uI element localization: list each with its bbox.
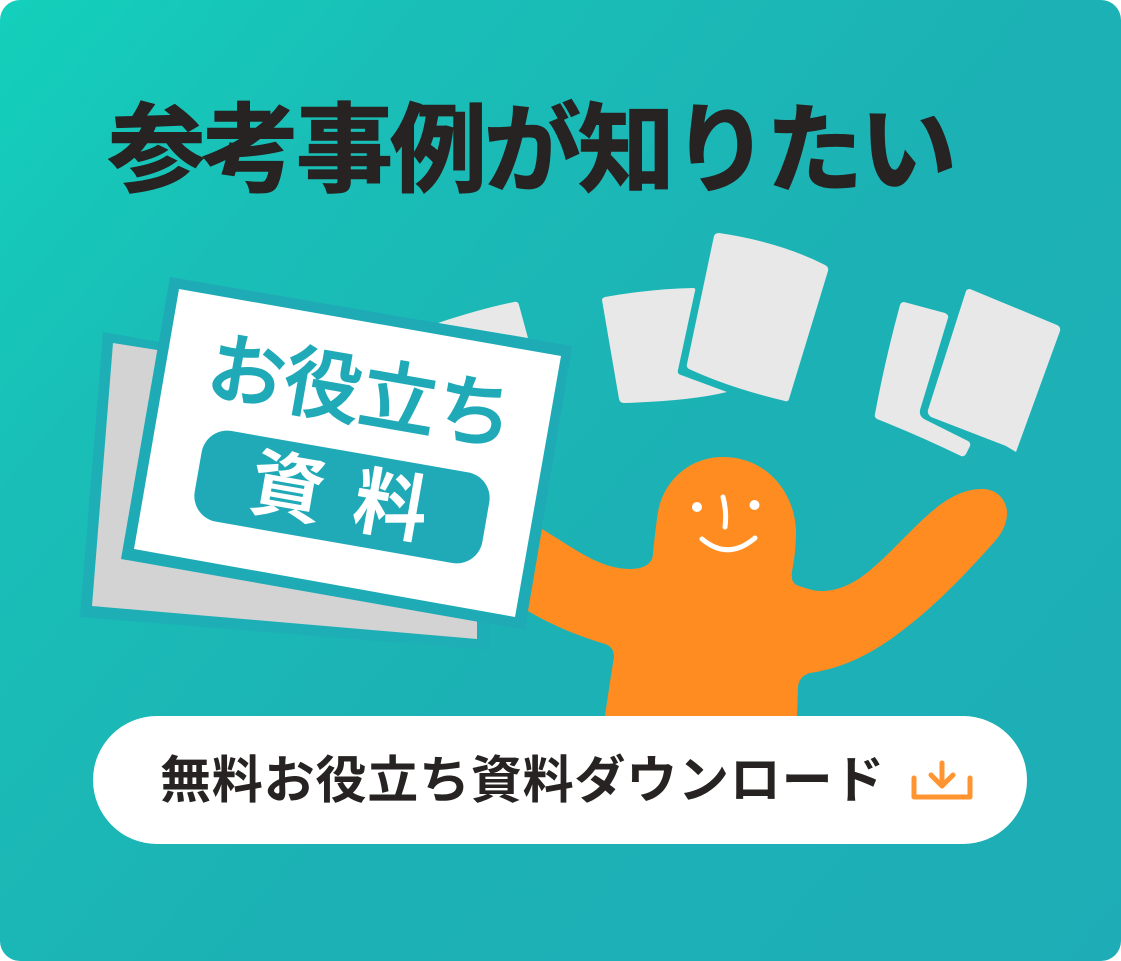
card label text: 資料 bbox=[244, 441, 465, 559]
illustration: stacked documents bbox=[80, 277, 572, 650]
light sheet behind the card bbox=[438, 302, 528, 338]
eye left bbox=[692, 502, 702, 512]
card label pill bbox=[190, 427, 494, 567]
button label: 無料お役立ち資料ダウンロード bbox=[160, 752, 885, 809]
character: orange figure bbox=[528, 457, 1007, 716]
card outline bbox=[121, 277, 572, 630]
nose bbox=[723, 497, 726, 527]
card heading: お役立ち bbox=[201, 325, 520, 462]
icon: download bbox=[914, 763, 970, 797]
back sheet outline bbox=[80, 332, 490, 650]
white card bbox=[134, 289, 561, 617]
download button bbox=[93, 716, 1027, 844]
button background bbox=[93, 716, 1027, 844]
icon: floating sheets left bbox=[602, 233, 828, 403]
title: 参考事例が知りたい bbox=[108, 96, 954, 205]
gray back sheet bbox=[92, 343, 477, 639]
icon: floating sheets right bbox=[875, 289, 1060, 456]
eye right bbox=[750, 500, 760, 510]
body bbox=[528, 457, 1007, 716]
smile bbox=[702, 538, 755, 550]
